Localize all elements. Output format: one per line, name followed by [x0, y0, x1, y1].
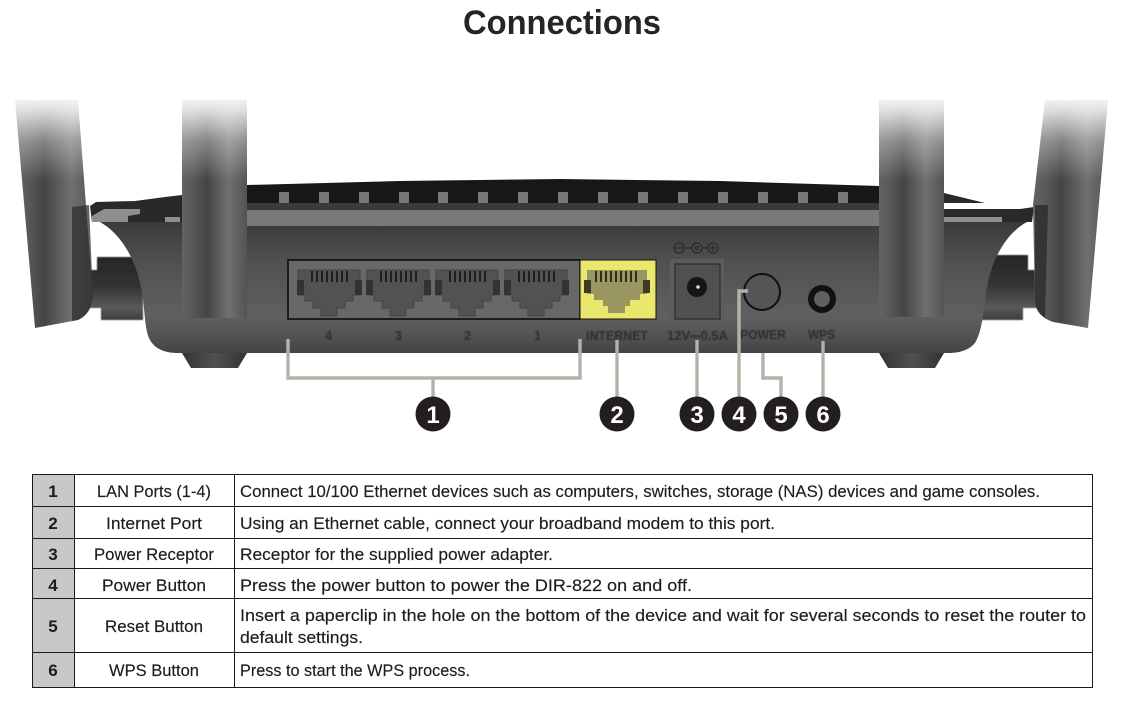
- row 5: Insert a paperclip in the hole on the bottom of the device and wait for several seconds to reset the router to: [240, 606, 1086, 625]
- line 2: [615, 340, 619, 397]
- row 6: WPS Button: [109, 661, 199, 680]
- row 4: 4: [48, 576, 58, 595]
- row 6: Press to start the WPS process.: [240, 661, 470, 680]
- router body: [100, 222, 1027, 353]
- Internet port: [580, 260, 656, 319]
- row 5: Reset Button: [105, 617, 203, 636]
- line 1: [288, 339, 580, 397]
- connections table: [32, 474, 1092, 688]
- silkscreen labels: [325, 328, 835, 343]
- outer left antenna: [15, 100, 93, 328]
- row 6: [48, 661, 470, 680]
- outer right antenna: [1033, 100, 1108, 328]
- row 4: [48, 576, 692, 595]
- row 1: 1: [48, 482, 58, 501]
- badge 3: 3: [690, 402, 704, 429]
- silkscreen labels: 4: [325, 329, 332, 343]
- badge 3: [680, 396, 714, 432]
- row 3: Power Receptor: [94, 545, 214, 564]
- inner right antenna: [879, 100, 944, 317]
- row 2: 2: [48, 514, 58, 533]
- inner left antenna: [182, 100, 247, 318]
- row 1: LAN Ports (1-4): [97, 482, 211, 501]
- left hinge: [88, 257, 143, 320]
- badge 1: 1: [426, 402, 440, 429]
- antenna fade: [0, 92, 1126, 180]
- row 3: 3: [48, 545, 58, 564]
- callout lines: [288, 291, 823, 397]
- silkscreen labels: INTERNET: [586, 329, 648, 343]
- silkscreen labels: 3: [395, 329, 402, 343]
- row 6: 6: [48, 661, 58, 680]
- rear top vents: [247, 179, 880, 212]
- power button: [744, 274, 780, 310]
- line 4: [739, 291, 748, 397]
- title: Connections: [463, 4, 661, 42]
- row 3: Receptor for the supplied power adapter.: [240, 545, 553, 564]
- callout number badges: [416, 396, 840, 432]
- silkscreen labels: POWER: [740, 328, 786, 342]
- power receptor: [670, 259, 724, 319]
- polarity symbol: [674, 243, 718, 253]
- badge 2: 2: [610, 402, 624, 429]
- right hinge: [980, 255, 1037, 320]
- badge 2: [600, 396, 634, 432]
- LAN port block: [288, 260, 580, 319]
- row 2: Internet Port: [106, 514, 202, 533]
- left wing: [90, 195, 182, 222]
- wing highlights: [92, 209, 1002, 223]
- right antenna shadow: [1035, 205, 1048, 318]
- badge 6: [806, 396, 840, 432]
- left antenna shadow: [72, 205, 93, 321]
- badge 4: [722, 396, 756, 432]
- row 4: Press the power button to power the DIR-822 on and off.: [240, 576, 692, 595]
- row 2: Using an Ethernet cable, connect your broadband modem to this port.: [240, 514, 775, 533]
- silkscreen labels: WPS: [808, 328, 835, 342]
- badge 5: 5: [774, 402, 788, 429]
- line 3: [695, 340, 699, 397]
- row 5: [48, 606, 1086, 647]
- WPS button: [811, 288, 833, 310]
- badge 1: [416, 396, 450, 432]
- right wing: [944, 193, 1034, 222]
- badge 5: [764, 396, 798, 432]
- line 6: [821, 341, 825, 397]
- row 1: Connect 10/100 Ethernet devices such as computers, switches, storage (NAS) devices and game consoles.: [240, 482, 1040, 501]
- row 3: [48, 545, 553, 564]
- badge 4: 4: [732, 402, 746, 429]
- badge 6: 6: [816, 402, 830, 429]
- line 5: [763, 353, 781, 397]
- router illustration: [0, 92, 1126, 368]
- gray top band: [247, 210, 880, 226]
- row 4: Power Button: [102, 576, 206, 595]
- silkscreen labels: 2: [464, 329, 471, 343]
- silkscreen labels: 12V⎓0.5A: [667, 329, 728, 343]
- row 5: 5: [48, 617, 58, 636]
- feet: [182, 353, 944, 368]
- silkscreen labels: 1: [534, 329, 541, 343]
- row 5: default settings.: [240, 628, 363, 647]
